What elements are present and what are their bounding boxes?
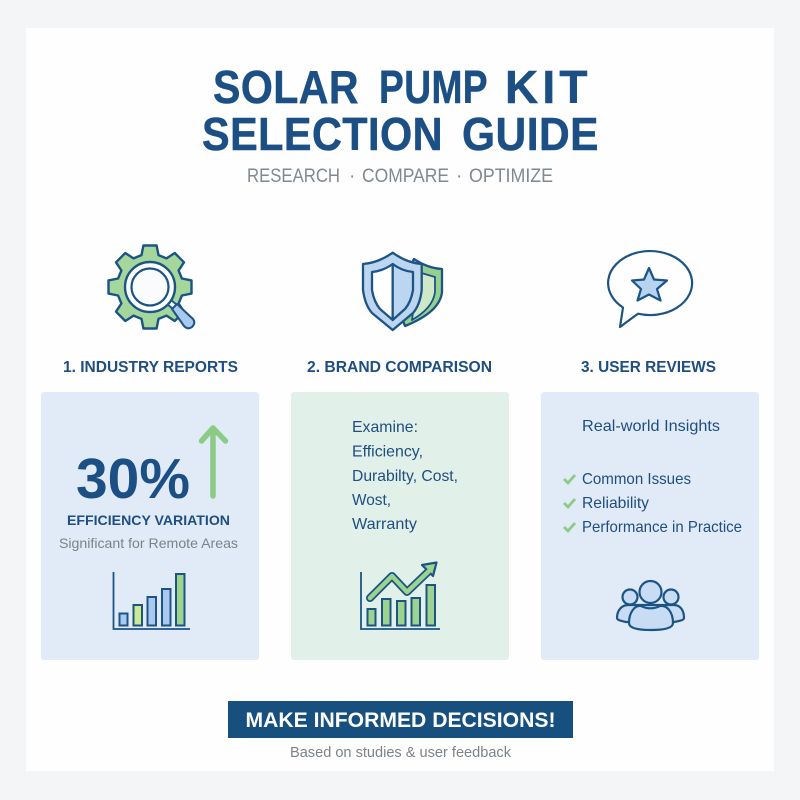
- panel heading: Real-world Insights: [582, 418, 720, 435]
- subtitle: RESEARCH: [247, 166, 340, 187]
- bar chart with trend arrow: [361, 562, 440, 629]
- panel: brand comparison: [291, 392, 509, 660]
- heading: industry reports: 1. INDUSTRY REPORTS: [63, 359, 238, 376]
- checklist: Reliability: [582, 495, 649, 512]
- subtitle: OPTIMIZE: [469, 166, 553, 187]
- title: KIT: [505, 61, 588, 113]
- subtitle: COMPARE: [362, 166, 449, 187]
- icon: people group: [617, 581, 684, 630]
- criteria text: Efficiency,: [352, 444, 423, 460]
- title: PUMP: [379, 61, 488, 113]
- checklist: Performance in Practice: [582, 519, 742, 536]
- checklist: [564, 471, 742, 536]
- call to action banner: MAKE INFORMED DECISIONS!: [246, 709, 556, 732]
- icon: speech bubble with star: [608, 251, 692, 327]
- title: [202, 61, 599, 160]
- heading: brand comparison: 2. BRAND COMPARISON: [307, 359, 492, 376]
- stat note: Significant for Remote Areas: [59, 535, 238, 551]
- panel: industry reports: [41, 392, 259, 660]
- title: SOLAR: [213, 61, 359, 113]
- criteria text: Warranty: [352, 516, 417, 533]
- title: SELECTION: [202, 108, 443, 160]
- criteria text: Examine:: [352, 419, 418, 436]
- subtitle: [247, 166, 553, 187]
- bar chart: [114, 572, 190, 629]
- criteria text: [352, 419, 458, 533]
- criteria text: Durabilty, Cost,: [352, 468, 458, 485]
- title: GUIDE: [462, 108, 599, 160]
- stat label: EFFICIENCY VARIATION: [67, 512, 230, 528]
- footnote: Based on studies & user feedback: [290, 745, 512, 761]
- panel: user reviews: [541, 392, 759, 660]
- call to action banner: [228, 701, 573, 738]
- criteria text: Wost,: [352, 492, 391, 509]
- big stat: 30%: [76, 447, 190, 511]
- checklist: Common Issues: [582, 471, 691, 488]
- heading: user reviews: 3. USER REVIEWS: [581, 359, 716, 376]
- subtitle: ·: [456, 166, 462, 187]
- arrow: upward: [202, 428, 226, 496]
- icon: gear with magnifier: [108, 246, 194, 328]
- icon: shields: [363, 253, 442, 330]
- subtitle: ·: [349, 166, 355, 187]
